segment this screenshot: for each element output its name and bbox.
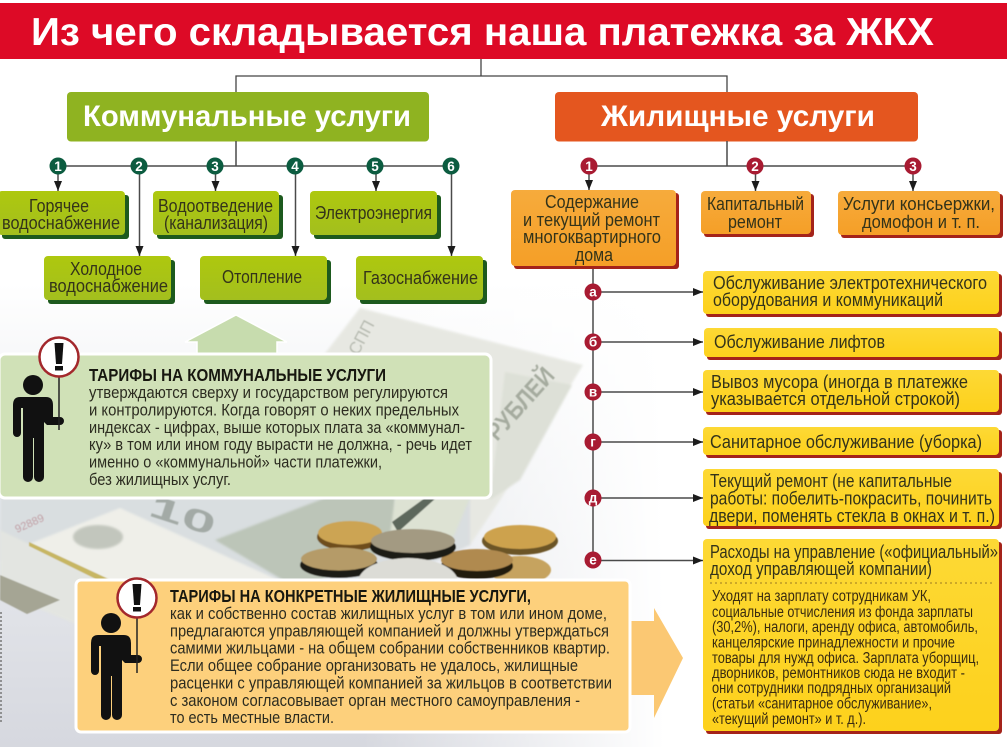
heading: communal services: Коммунальные услуги	[83, 100, 411, 133]
box: major repair	[701, 191, 814, 237]
text: housing tariffs body	[170, 604, 612, 727]
text: management costs details: дворников, ремонтников сюда не входит -	[712, 665, 965, 682]
box: sewerage: (канализация)	[164, 213, 268, 233]
text: housing tariffs body: то есть местные власти.	[170, 708, 334, 727]
housing letter badges: г	[590, 434, 596, 450]
box: lift maintenance	[704, 328, 1002, 360]
panel: housing tariffs	[76, 580, 630, 732]
heading: housing services: Жилищные услуги	[600, 100, 875, 133]
box: garbage removal: Вывоз мусора (иногда в платежке	[711, 372, 968, 392]
housing letter badges: б	[589, 334, 597, 350]
text: communal tariffs body: без жилищных услуг.	[89, 470, 231, 489]
box: maintenance and current repair: многоквартирного	[523, 227, 661, 247]
title: Из чего складывается наша платежка за ЖКХ	[31, 11, 934, 54]
box: lift maintenance: Обслуживание лифтов	[714, 332, 885, 352]
box: maintenance and current repair: дома	[575, 245, 614, 265]
housing number badges: 3	[909, 159, 917, 174]
arrow: right to housing services	[625, 608, 683, 718]
box: major repair: Капитальный	[707, 194, 804, 214]
box: heating	[200, 256, 331, 304]
icon: person with warning sign	[13, 338, 78, 482]
panel: communal tariffs	[0, 354, 491, 498]
communal connectors	[58, 141, 452, 256]
box: electrical maintenance: оборудования и коммуникаций	[713, 290, 943, 310]
housing letter badges: д	[589, 490, 598, 506]
text: communal tariffs body: индексах - цифрах, выше которых плата за «коммунал-	[89, 418, 465, 437]
box: sanitary maintenance: Санитарное обслуживание (уборка)	[710, 432, 982, 452]
text: management costs details: канцелярские принадлежности и прочие	[712, 634, 955, 652]
housing letter badges: а	[589, 284, 597, 300]
box: hot water	[0, 191, 129, 239]
text: housing tariffs body: самими жильцами - на общем собрании собственников квартир.	[170, 638, 610, 658]
text: management costs details: они сотрудники подрядных организаций	[712, 680, 951, 697]
box: maintenance and current repair: и текущий ремонт	[523, 210, 660, 230]
heading: communal tariffs: ТАРИФЫ НА КОММУНАЛЬНЫЕ УСЛУГИ	[89, 365, 386, 385]
housing letter badges	[584, 284, 602, 568]
text: communal tariffs body: ку» в том или ином году вырасти не должна, - речь идет	[89, 435, 472, 454]
box: maintenance and current repair: Содержание	[545, 192, 639, 212]
housing connectors	[589, 141, 913, 560]
box: electrical maintenance	[703, 271, 1002, 317]
box: concierge services: Услуги консьержки,	[843, 194, 995, 214]
box: gas: Газоснабжение	[363, 268, 478, 288]
text: communal tariffs body: утверждаются сверху и государством регулируются	[89, 383, 448, 402]
box: electricity: Электроэнергия	[315, 203, 432, 223]
photo: banknotes and coins: 10	[145, 488, 220, 543]
box: maintenance and current repair	[511, 190, 679, 269]
text: communal tariffs body: именно о «коммунальной» части платежки,	[89, 452, 382, 472]
text: management costs details: (статьи «санитарное обслуживание»,	[712, 696, 932, 712]
box: management costs	[703, 539, 1002, 734]
box: hot water: Горячее	[29, 196, 89, 216]
text: housing tariffs body: предлагаются управляющей компанией и должны утверждаться	[170, 622, 609, 640]
box: management costs: доход управляющей компании)	[710, 559, 932, 579]
text: management costs details: Уходят на зарплату сотрудникам УК,	[712, 588, 931, 605]
text: housing tariffs body: с законом согласовывает орган местного самоуправления -	[170, 691, 580, 710]
photo: banknotes and coins	[0, 308, 583, 624]
text: communal tariffs body: и контролируются. Когда говорят о неких предельных	[89, 400, 459, 420]
housing number badges: 1	[585, 159, 593, 174]
communal number badges: 2	[135, 159, 143, 174]
box: sewerage	[153, 191, 283, 239]
communal number badges: 5	[371, 159, 379, 174]
text: management costs details: «текущий ремонт» и т. д.).	[712, 711, 866, 728]
text: housing tariffs body: расценки с управляющей компанией за жильцов в соответствии	[170, 674, 612, 692]
box: garbage removal: указывается отдельной строкой)	[711, 389, 960, 409]
text: housing tariffs body: как и собственно состав жилищных услуг в том или ином доме,	[170, 604, 607, 623]
communal number badges: 1	[54, 159, 62, 174]
box: cold water: Холодное	[70, 259, 142, 279]
icon: person with warning sign	[91, 578, 156, 720]
housing letter badges: в	[589, 384, 597, 400]
text: communal tariffs body	[89, 383, 472, 489]
box: current repair	[703, 469, 1002, 529]
box: gas	[356, 256, 487, 304]
housing number badges	[580, 158, 922, 174]
box: garbage removal	[703, 370, 1002, 415]
box: concierge services	[838, 191, 1003, 238]
box: cold water	[44, 256, 175, 304]
heading: housing services	[555, 92, 918, 142]
credit strip	[0, 612, 2, 722]
box: sewerage: Водоотведение	[158, 196, 273, 216]
box: sanitary maintenance	[703, 427, 1002, 458]
photo: banknotes and coins: СПП	[345, 317, 378, 358]
box: concierge services: домофон и т. п.	[862, 212, 980, 232]
box: heating: Отопление	[222, 267, 302, 287]
box: current repair: Текущий ремонт (не капитальные	[710, 471, 952, 491]
title	[0, 3, 1007, 59]
heading: housing tariffs: ТАРИФЫ НА КОНКРЕТНЫЕ ЖИЛИЩНЫЕ УСЛУГИ,	[170, 586, 531, 606]
housing letter badges: е	[589, 552, 597, 568]
heading: communal services	[67, 92, 429, 142]
box: hot water: водоснабжение	[2, 213, 120, 233]
text: housing tariffs body: Если общее собрание организовать не удалось, жилищные	[170, 656, 578, 675]
communal number badges	[50, 158, 460, 174]
text: management costs details	[712, 588, 979, 728]
communal number badges: 4	[291, 159, 299, 174]
connector: title to headings	[236, 59, 727, 92]
photo: banknotes and coins: РУБЛЕЙ	[479, 361, 560, 446]
communal number badges: 6	[447, 159, 455, 174]
box: major repair: ремонт	[728, 212, 782, 232]
photo: banknotes and coins: 92889	[13, 512, 46, 536]
box: cold water: водоснабжение	[49, 276, 168, 296]
housing number badges: 2	[751, 159, 759, 174]
box: electricity	[310, 191, 441, 239]
arrow: up to communal services	[185, 315, 287, 356]
communal number badges: 3	[211, 159, 219, 174]
